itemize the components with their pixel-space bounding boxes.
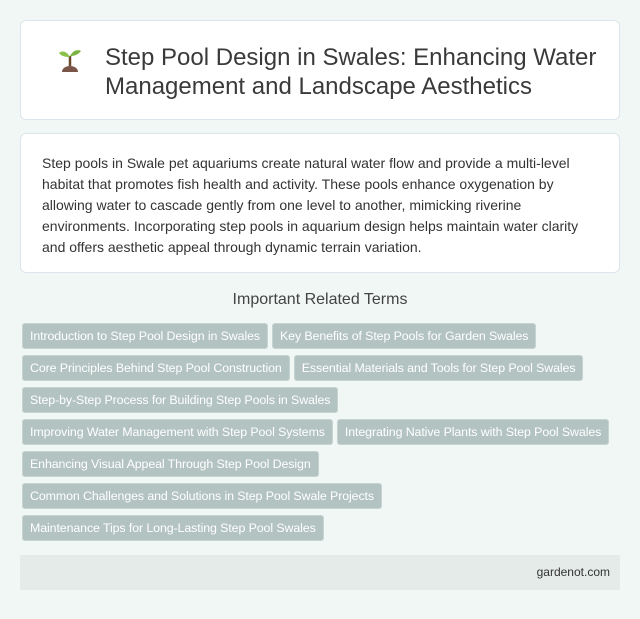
header card [20, 20, 620, 120]
tag row 7: Maintenance Tips for Long-Lasting Step Pool Swales [30, 521, 316, 535]
tag row 3: Step-by-Step Process for Building Step Pools in Swales [30, 393, 330, 407]
tag row 6: Common Challenges and Solutions in Step Pool Swale Projects [30, 489, 374, 503]
tag row 1: Key Benefits of Step Pools for Garden Swales [280, 329, 528, 343]
description card [20, 133, 620, 273]
tag row 2: Essential Materials and Tools for Step Pool Swales [302, 361, 575, 375]
tag row 4 [22, 419, 609, 445]
tag row 2: Core Principles Behind Step Pool Construction [30, 361, 282, 375]
description text: Step pools in Swale pet aquariums create natural water flow and provide a multi-level habitat that promotes fish health and activity. These pools enhance oxygenation by allowing water to cascade gently from one level to another, mimicking riverine environments. Incorporating step pools in aquarium design helps maintain water clarity and offers aesthetic appeal through dynamic terrain variation. [42, 155, 578, 255]
tag row 1: Introduction to Step Pool Design in Swales [30, 329, 260, 343]
icon: seedling [59, 50, 81, 72]
tag row 4: Improving Water Management with Step Pool Systems [30, 425, 325, 439]
footer text: gardenot.com [537, 565, 610, 579]
tag row 5: Enhancing Visual Appeal Through Step Pool Design [30, 457, 311, 471]
tag row 1 [22, 323, 536, 349]
tag row 4: Integrating Native Plants with Step Pool Swales [345, 425, 601, 439]
tag row 2 [22, 355, 583, 381]
footer [20, 555, 620, 590]
title: Step Pool Design in Swales: Enhancing Water Management and Landscape Aesthetics [105, 44, 596, 100]
section heading: Important Related Terms [233, 291, 407, 308]
